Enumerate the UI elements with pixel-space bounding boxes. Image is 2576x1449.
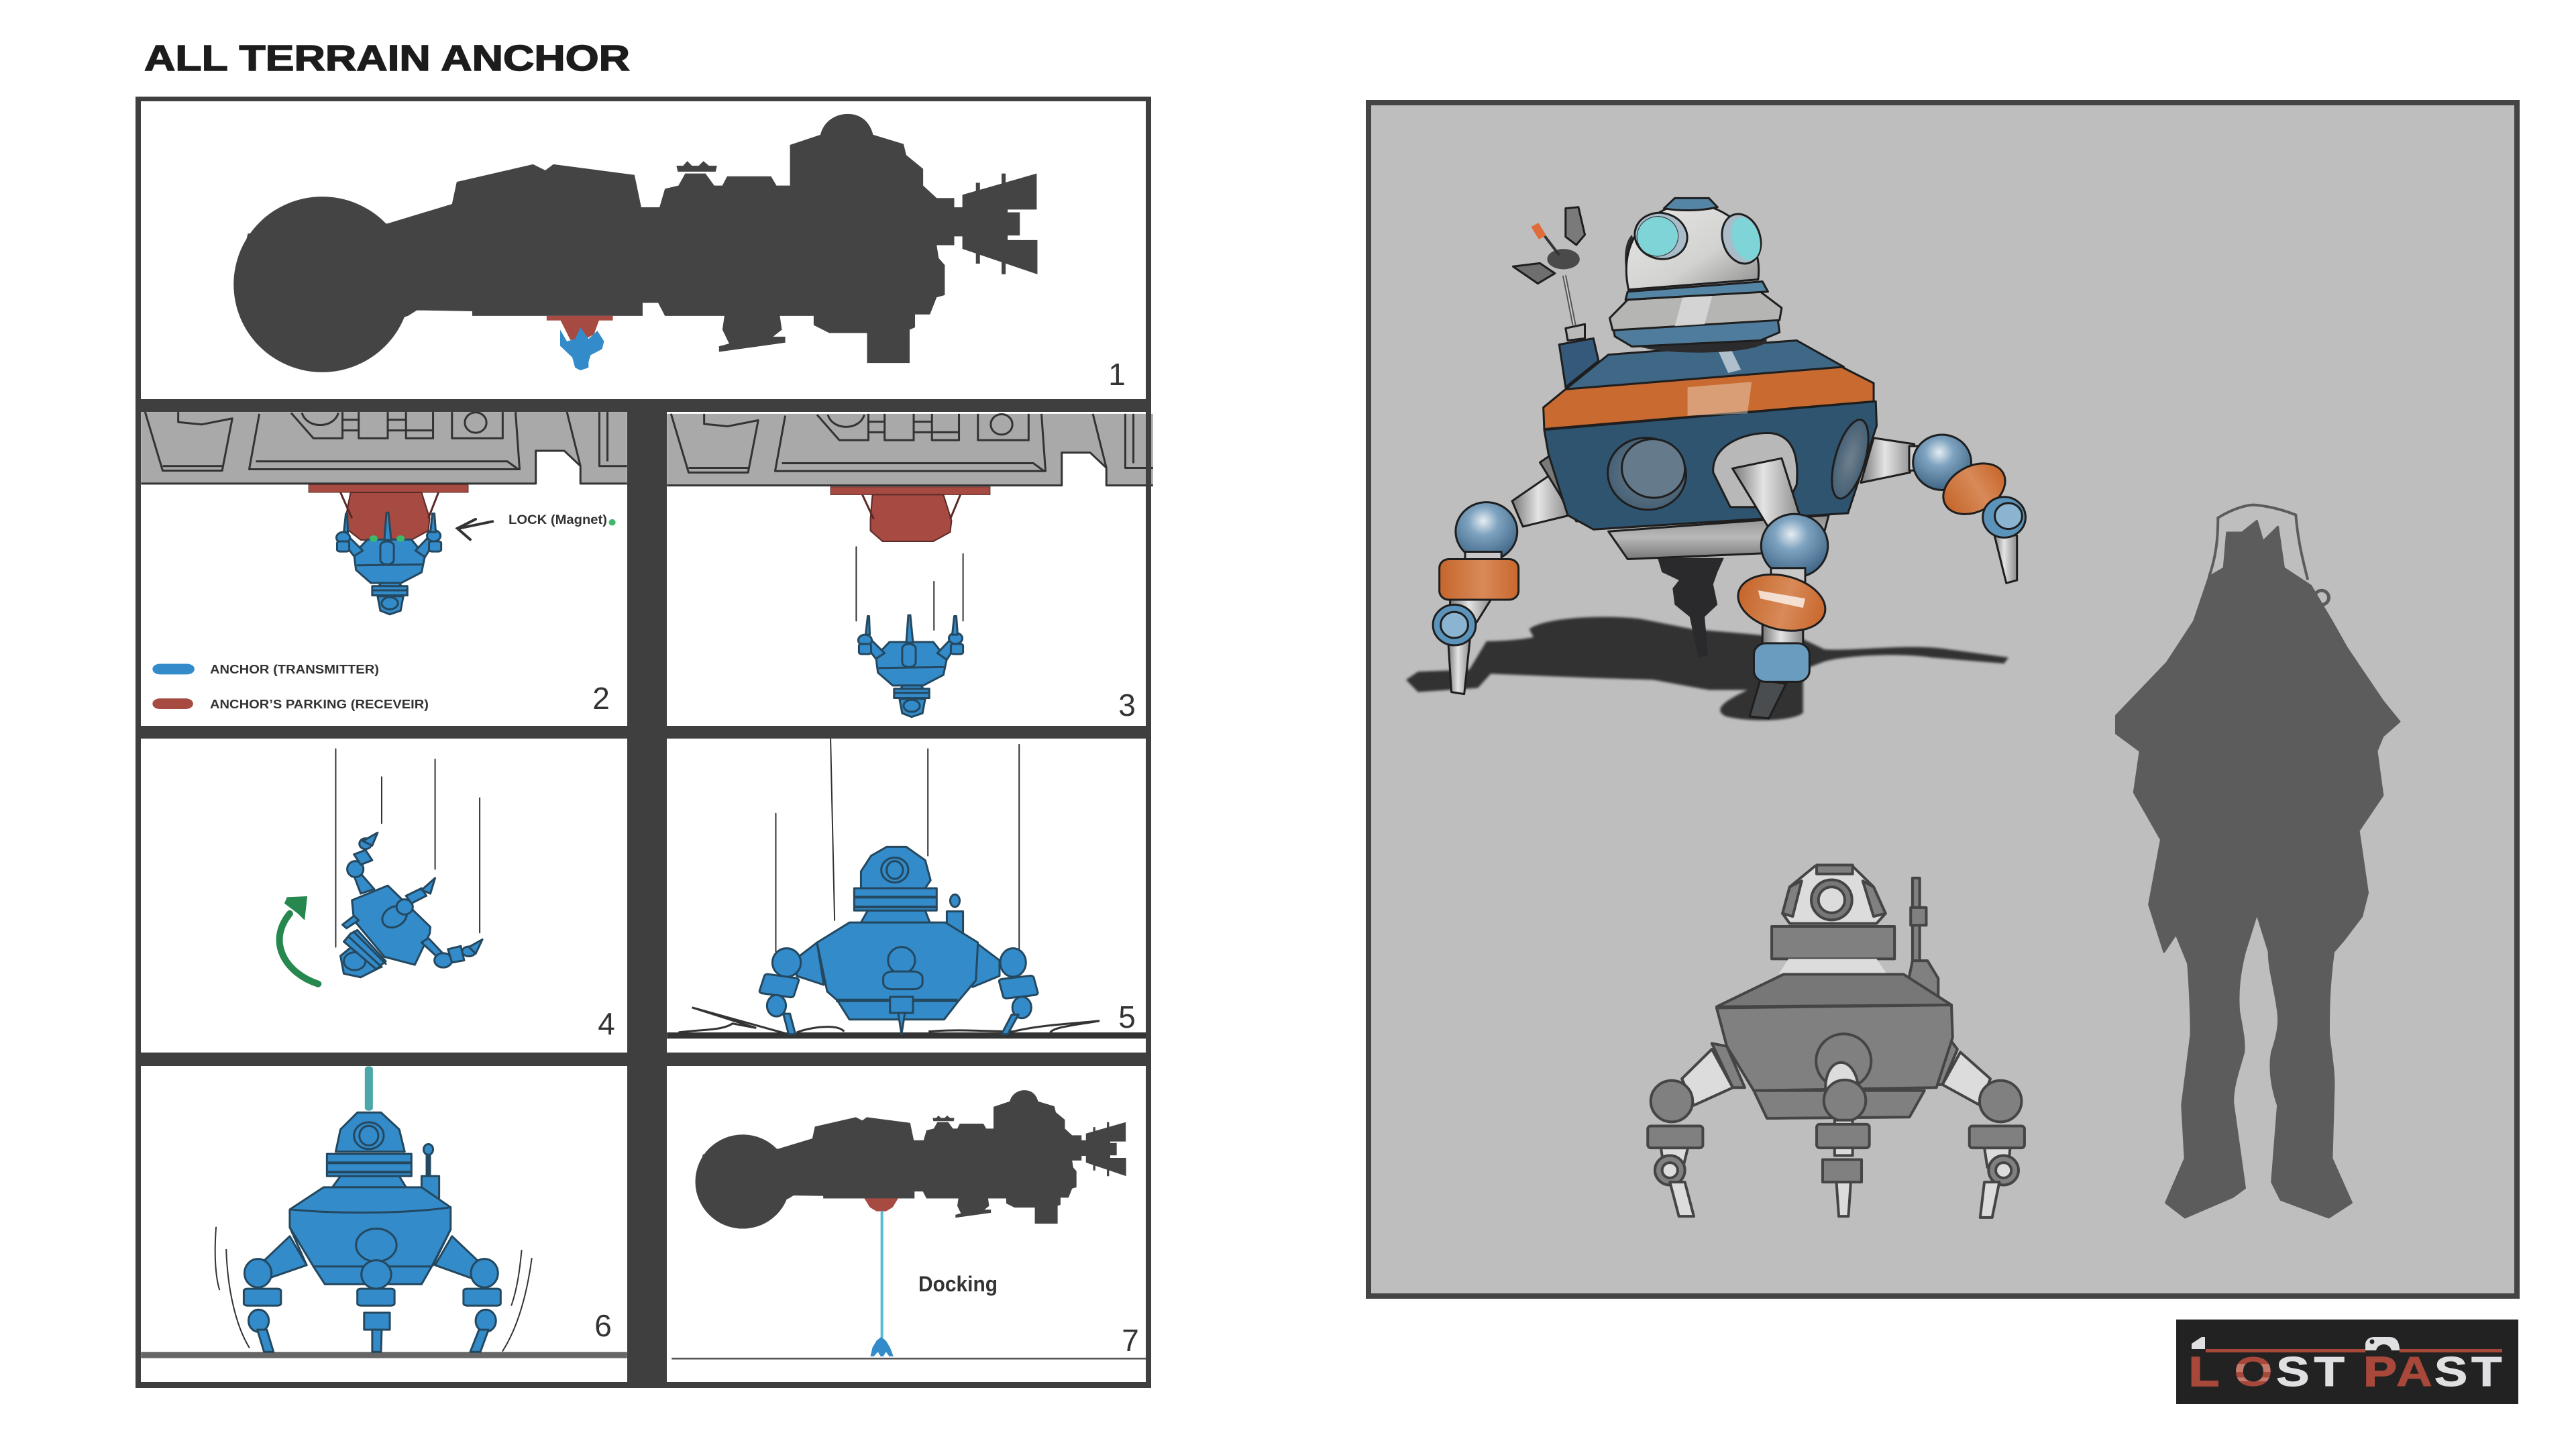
teal beam (365, 1066, 373, 1111)
right panel: character scale sheet (1368, 103, 2517, 1296)
panel number 2: 2 (592, 681, 610, 716)
left leg (1433, 452, 1593, 694)
docking label: Docking (918, 1272, 998, 1296)
frame bars (136, 97, 1151, 1388)
panel number 4: 4 (598, 1006, 615, 1041)
legend: anchor: ANCHOR (TRANSMITTER) (210, 662, 379, 676)
shadow (1406, 617, 2008, 720)
antenna (1513, 207, 1599, 387)
legend: parking: ANCHOR’S PARKING (RECEVEIR) (210, 697, 429, 711)
panel number 6: 6 (594, 1308, 612, 1343)
panel number 7: 7 (1122, 1323, 1139, 1358)
colored 3D robot render (1406, 198, 2025, 720)
title: ALL TERRAIN ANCHOR (144, 38, 630, 78)
panel 1: ship silhouette with anchor docked (233, 114, 1126, 392)
logo: Lost Past: O (2234, 1348, 2273, 1395)
front leg (1713, 433, 1832, 718)
logo: Lost Past: A (2396, 1348, 2432, 1395)
top plate (1566, 340, 1843, 389)
panel 5: anchor hitting the ground (667, 739, 1147, 1038)
panel number 3: 3 (1118, 688, 1136, 722)
orange band (1544, 367, 1874, 429)
panel 6: anchor deployed with beam (141, 1066, 627, 1358)
rear leg (1658, 558, 1724, 657)
rotation arrow (280, 914, 318, 984)
right leg (1861, 435, 2025, 583)
body main (1544, 401, 1877, 529)
logo: Lost Past: P (2363, 1348, 2397, 1395)
body underside (1609, 515, 1829, 559)
panel 2: anchor locked in its parking (141, 412, 627, 716)
docking beam (881, 1211, 883, 1338)
panel number 1: 1 (1108, 357, 1126, 392)
logo: Lost Past: T (2471, 1348, 2502, 1395)
side portholes (1597, 416, 1876, 520)
legend swatches (152, 663, 195, 674)
neck and head (1610, 198, 1782, 353)
panel number 5: 5 (1118, 1000, 1136, 1034)
logo: Lost Past: T (2314, 1348, 2345, 1395)
lock label: LOCK (Magnet) (508, 513, 607, 527)
logo: Lost Past: S (2434, 1348, 2467, 1395)
storyboard panel frame (136, 97, 1153, 1388)
logo: Lost Past: L (2189, 1348, 2219, 1395)
lock arrow (458, 519, 492, 539)
panel 4: anchor rotating while falling (280, 749, 615, 1041)
logo: Lost Past (2176, 1320, 2518, 1404)
grey line-drawing robot (1648, 865, 2025, 1218)
human silhouette for scale (2116, 505, 2400, 1218)
panel 7: ship docking with anchor (672, 1090, 1147, 1360)
panel 3: anchor released (667, 414, 1153, 722)
logo: Lost Past: S (2276, 1348, 2310, 1395)
